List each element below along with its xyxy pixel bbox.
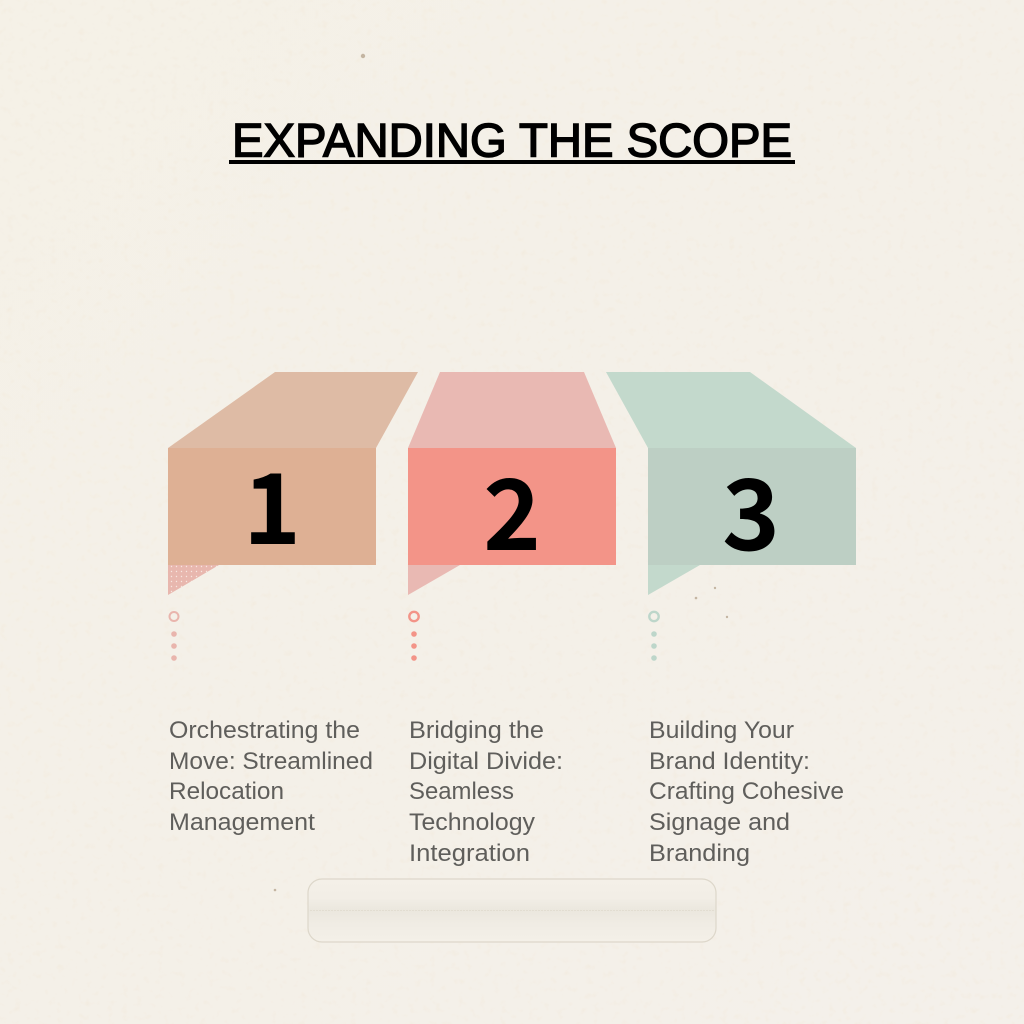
text block: step 3 description: Branding: [649, 840, 750, 867]
text block: step 1 description: [169, 717, 373, 836]
text block: step 2 description: Bridging the: [409, 717, 544, 744]
text block: step 1 description: Relocation: [169, 778, 284, 805]
text block: step 3 description: Crafting Cohesive: [649, 778, 844, 805]
empty rounded panel: [308, 879, 716, 942]
text block: step 3 description: Brand Identity:: [649, 748, 810, 775]
icon: dotted connector 3: [649, 612, 659, 661]
block 1 top face: [168, 372, 418, 448]
text block: step 2 description: Seamless: [409, 778, 514, 805]
block 2 tail: [408, 565, 460, 595]
text block: step 1 description: Management: [169, 809, 315, 836]
block 2 top face: [408, 372, 616, 448]
block 1 front face: [168, 448, 376, 565]
text block: step 3 description: Building Your: [649, 717, 794, 744]
text block: step 1 description: Move: Streamlined: [169, 748, 373, 775]
block 1 tail: [168, 565, 219, 595]
text block: step 1 description: Orchestrating the: [169, 717, 360, 744]
number 3: 3: [722, 437, 780, 579]
text block: step 2 description: [409, 717, 563, 867]
panel: step 1 block: [168, 372, 418, 595]
text block: step 3 description: [649, 717, 844, 867]
text block: step 2 description: Integration: [409, 840, 530, 867]
icon: dotted connector 1: [170, 612, 178, 661]
block 3 front face: [648, 448, 856, 565]
panel: step 2 block: [408, 372, 616, 595]
block 2 front face: [408, 448, 616, 565]
text block: step 2 description: Technology: [409, 809, 535, 836]
text block: step 2 description: Digital Divide:: [409, 748, 563, 775]
panel: step 3 block: [606, 372, 856, 595]
icon: dotted connector 2: [409, 612, 419, 661]
text block: step 3 description: Signage and: [649, 809, 790, 836]
block 3 top face: [606, 372, 856, 448]
number 2: 2: [483, 437, 541, 579]
title: EXPANDING THE SCOPE: [232, 114, 792, 166]
block 3 tail: [648, 565, 700, 595]
number 1: 1: [243, 431, 301, 573]
